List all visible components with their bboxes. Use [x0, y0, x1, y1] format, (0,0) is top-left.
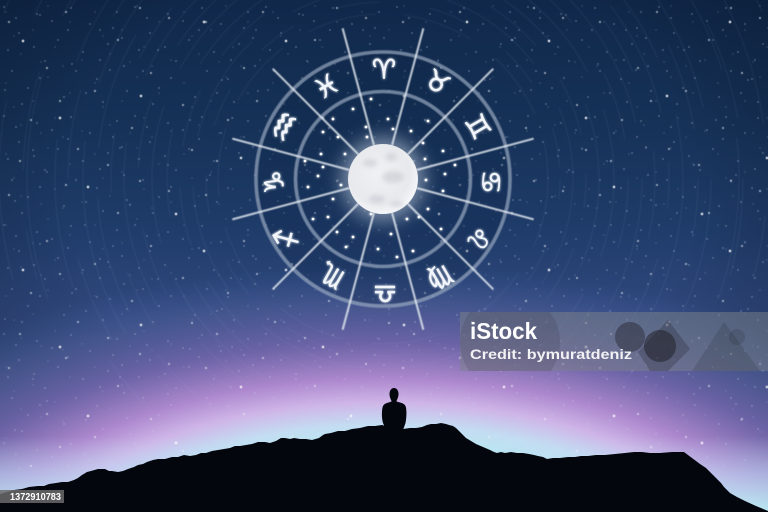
- image id badge: [0, 490, 64, 503]
- zodiac signs: [259, 54, 506, 308]
- zodiac signs: ♉︎: [419, 64, 455, 102]
- zodiac signs: ♏︎: [314, 256, 350, 294]
- pale horizon band: [0, 436, 768, 512]
- zodiac signs: ♒︎: [259, 103, 311, 151]
- zodiac signs: ♋︎: [474, 170, 506, 194]
- zodiac signs: ♎︎: [373, 278, 397, 308]
- rings: [256, 52, 510, 306]
- iStock logo text: iStock: [470, 318, 537, 344]
- constellation stars: [305, 99, 455, 257]
- zodiac signs: ♈︎: [372, 54, 396, 86]
- mountain silhouette: [0, 423, 768, 512]
- zodiac signs: ♓︎: [309, 68, 345, 106]
- zodiac wheel: [232, 28, 534, 330]
- moon glow: [341, 137, 425, 221]
- image id badge: 1372910783: [10, 492, 61, 503]
- zodiac signs: ♊︎: [458, 109, 496, 145]
- iStock watermark panel: [460, 312, 768, 371]
- spokes: [232, 28, 534, 330]
- zodiac signs: ♍︎: [422, 258, 458, 296]
- credit line: Credit: bymuratdeniz: [470, 346, 632, 362]
- full moon: [348, 144, 418, 214]
- zodiac signs: ♌︎: [459, 220, 497, 256]
- zodiac signs: ♑︎: [260, 170, 290, 194]
- watermark shapes: [460, 312, 760, 371]
- zodiac signs: ♐︎: [268, 220, 306, 256]
- meditating person silhouette: [382, 388, 406, 430]
- wheel tint: [255, 51, 511, 307]
